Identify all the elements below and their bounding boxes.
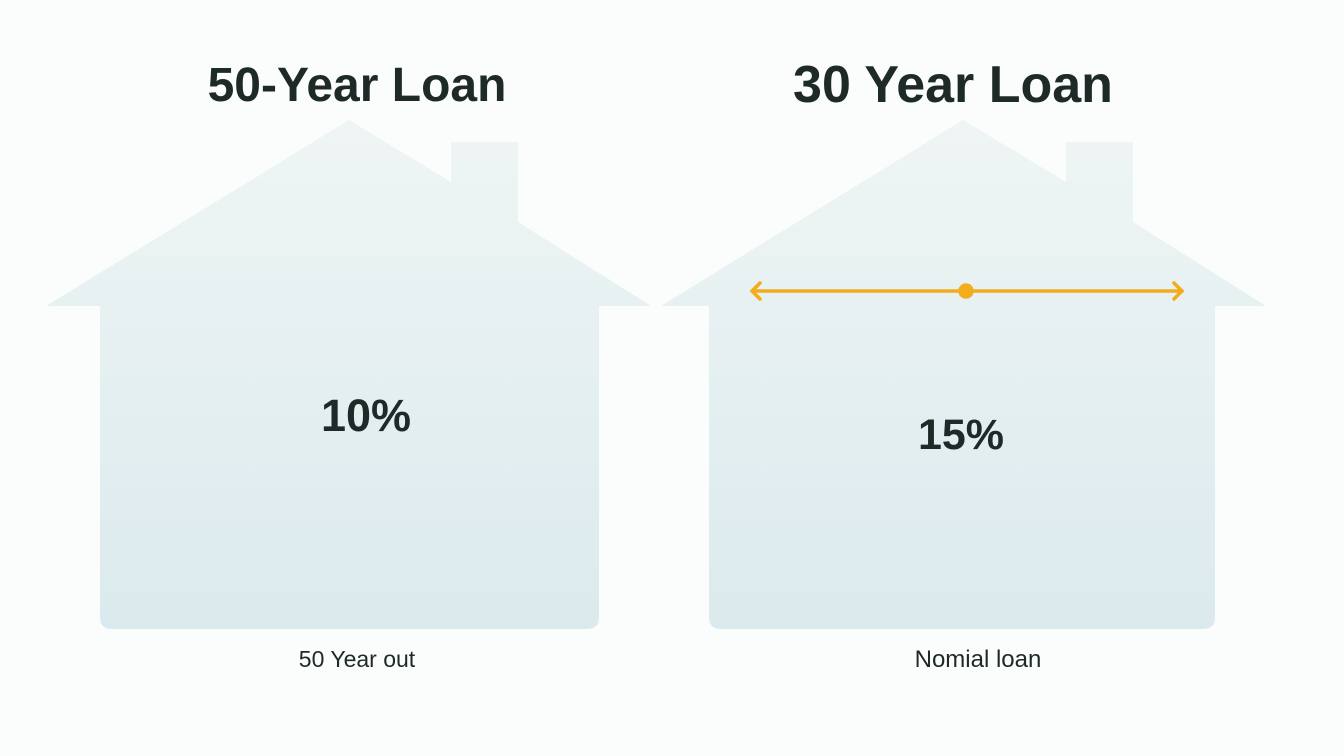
house: 30-year xyxy=(661,120,1266,629)
house: 50-year xyxy=(46,120,651,629)
title: 50-Year Loan: 50-Year Loan xyxy=(208,59,506,112)
label: Nomial loan: Nomial loan xyxy=(915,646,1041,673)
label: 50 Year out: 50 Year out xyxy=(299,646,415,672)
title: 30 Year Loan: 30 Year Loan xyxy=(793,56,1113,114)
value 15%: 15% xyxy=(918,411,1004,459)
value 10%: 10% xyxy=(321,390,411,441)
arrow: double-headed yellow xyxy=(752,283,1182,299)
